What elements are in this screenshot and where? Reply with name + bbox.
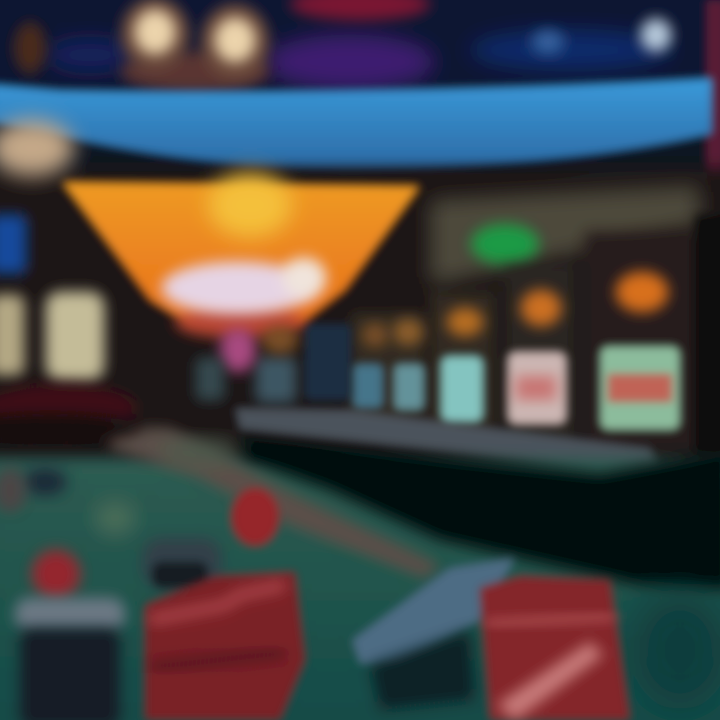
left slot machines	[0, 215, 138, 432]
light: left ceiling lamp	[121, 0, 189, 70]
chip: blue-grey chip stack	[352, 558, 515, 664]
left wall lights	[0, 120, 74, 176]
blue curved band	[0, 78, 712, 169]
counter ledge	[235, 408, 660, 468]
chip: large red stack	[145, 572, 305, 720]
machine toppers	[616, 272, 668, 312]
machine screens	[600, 346, 680, 430]
light: right ceiling lamp	[201, 4, 269, 80]
table felt details	[0, 440, 720, 710]
green table	[0, 458, 720, 720]
chip: small red centre	[231, 488, 279, 546]
table edge	[110, 428, 440, 578]
right upper wall	[430, 185, 700, 285]
chip: left dark stack	[15, 598, 125, 630]
green light	[471, 224, 539, 264]
orange triangular sign	[62, 173, 420, 338]
glowing white sign text blob	[162, 262, 314, 314]
dark wall under band	[0, 168, 720, 463]
black counter base	[240, 436, 720, 590]
chip: small red left	[32, 550, 80, 598]
casino chips	[15, 488, 630, 720]
ceiling with lights	[0, 0, 720, 210]
chip: large red right stack	[480, 576, 630, 720]
right edge dark pillar	[695, 215, 720, 455]
chip: grey-blue dark stack	[142, 538, 222, 588]
slot machine row	[196, 232, 695, 450]
light: far right	[641, 19, 671, 51]
